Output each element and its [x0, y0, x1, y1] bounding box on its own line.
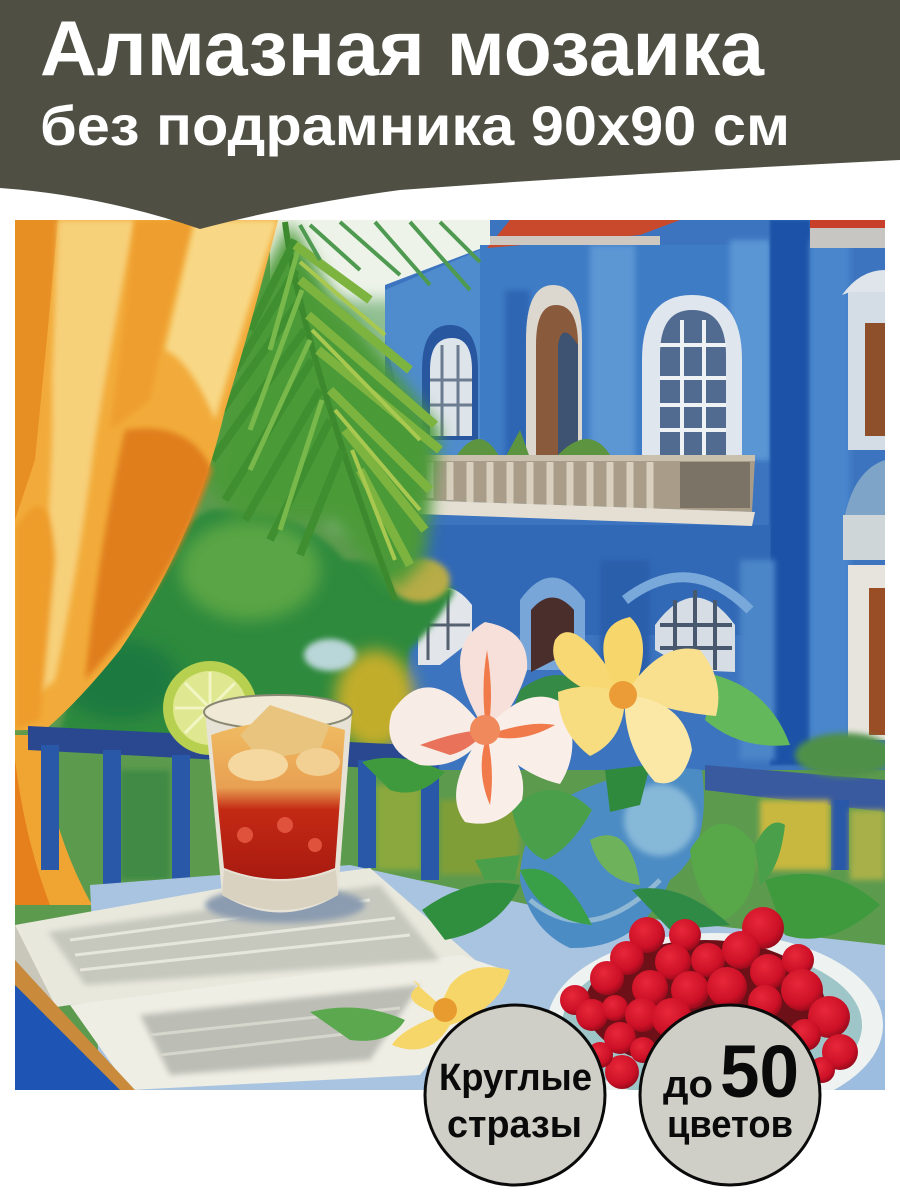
- subtitle: без подрамника 90х90 см: [40, 94, 790, 157]
- blue vase: [520, 768, 704, 948]
- header banner: [0, 0, 900, 229]
- dark blue tablecloth corner: [15, 985, 130, 1090]
- badge: up to 50 colours: до: [663, 1064, 713, 1106]
- title: Алмазная мозаика: [40, 4, 765, 92]
- arched window upper left: [422, 325, 478, 440]
- palm fronds: [205, 222, 480, 600]
- right white tower: [842, 270, 885, 740]
- lower windows and door: [418, 577, 750, 672]
- blue building: [385, 220, 885, 770]
- orange curtain: [15, 220, 278, 905]
- badge: up to 50 colours: [640, 1005, 820, 1185]
- glass shadow: [205, 887, 365, 923]
- table top: [90, 865, 885, 1090]
- badge: round rhinestones: стразы: [447, 1104, 582, 1146]
- plate: [549, 933, 883, 1090]
- small yellow flower on book: [310, 967, 510, 1050]
- open book: [15, 868, 505, 1090]
- badge: up to 50 colours: 50: [720, 1030, 799, 1113]
- red roof: [487, 220, 885, 248]
- red cherries: [560, 907, 858, 1089]
- plants on balcony: [457, 430, 610, 455]
- arched window upper right: [642, 295, 742, 458]
- cocktail glass: [204, 695, 352, 912]
- badge: round rhinestones: [425, 1005, 605, 1185]
- green leaves: [362, 675, 880, 940]
- balcony: [415, 455, 755, 526]
- arched door upper centre: [526, 285, 582, 456]
- badge: round rhinestones: Круглые: [439, 1057, 592, 1099]
- blue railing: [28, 726, 895, 895]
- lime slice: [163, 661, 257, 755]
- badge: up to 50 colours: цветов: [667, 1104, 793, 1146]
- white hibiscus flower: [389, 622, 572, 824]
- yellow hibiscus flower: [553, 617, 718, 783]
- painting: tropical balcony: [15, 220, 895, 1117]
- garden foliage: [60, 509, 455, 750]
- sky and distant background: [270, 220, 500, 530]
